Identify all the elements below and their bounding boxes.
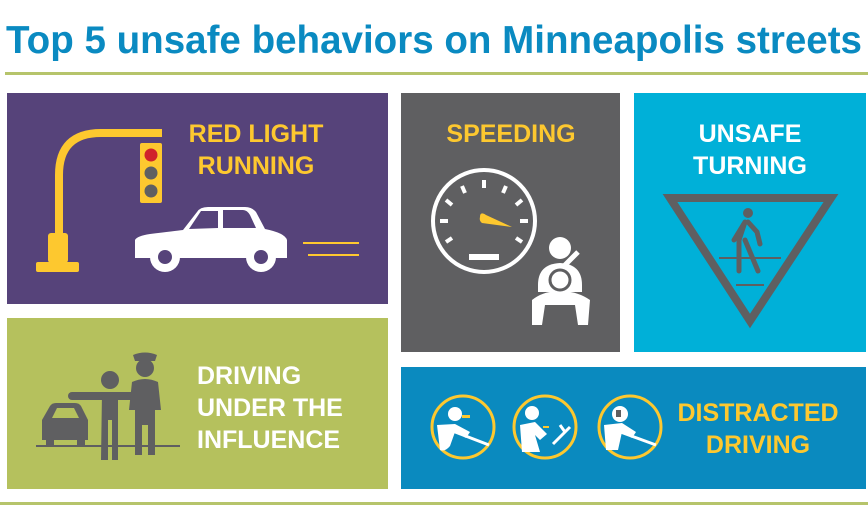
panel: driving under the influence: INFLUENCE bbox=[197, 426, 340, 454]
icon: traffic light bbox=[36, 133, 162, 272]
icon: eating bbox=[432, 396, 494, 458]
icon: car bbox=[135, 207, 287, 272]
icon: phone call bbox=[599, 396, 661, 458]
icon: pedestrian crossing sign bbox=[670, 198, 831, 321]
panel: distracted driving bbox=[401, 367, 866, 489]
panel: unsafe turning: TURNING bbox=[693, 152, 807, 180]
heading: speeding: SPEEDING bbox=[446, 120, 576, 148]
panel: unsafe turning bbox=[634, 93, 866, 352]
icon: police stop bbox=[36, 352, 180, 460]
panel: driving under the influence: UNDER THE bbox=[197, 394, 343, 422]
icon: texting bbox=[514, 396, 576, 458]
title: Top 5 unsafe behaviors on Minneapolis streets bbox=[6, 19, 862, 62]
heading: DUI: DRIVING bbox=[197, 362, 301, 390]
panel: red light running bbox=[7, 93, 388, 304]
heading: unsafe turning: UNSAFE bbox=[699, 120, 801, 148]
panel: red light running: RUNNING bbox=[198, 152, 314, 180]
heading: red light running: RED LIGHT bbox=[189, 120, 323, 148]
heading: distracted driving: DISTRACTED bbox=[677, 399, 839, 427]
icon: speedometer bbox=[433, 170, 535, 272]
panel: distracted driving: DRIVING bbox=[706, 431, 810, 459]
icon: motion lines bbox=[303, 243, 359, 255]
panel: speeding bbox=[401, 93, 620, 352]
panel: driving under the influence bbox=[7, 318, 388, 489]
icon: seatbelt driver bbox=[532, 237, 590, 325]
